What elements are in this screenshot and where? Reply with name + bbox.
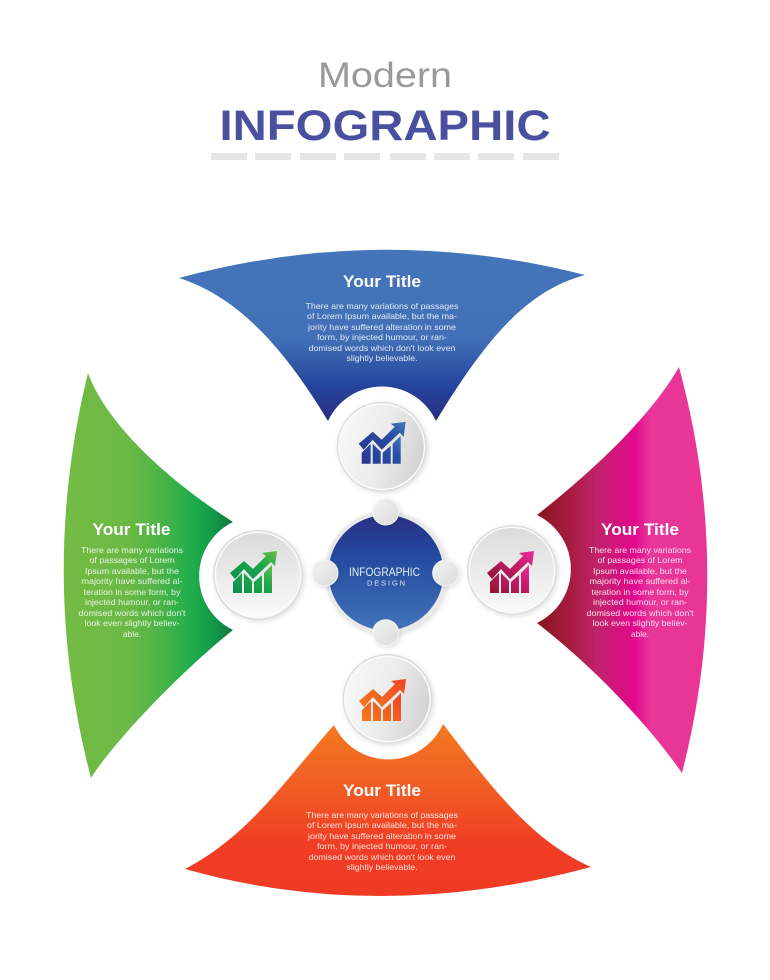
text block: blue panel body: slightly believable. — [346, 354, 418, 363]
text block: magenta panel body: domised words which don't — [586, 609, 694, 618]
text block: orange panel body: form, by injected humour, or ran- — [317, 842, 447, 851]
text block: magenta panel body: There are many variations — [589, 546, 691, 555]
text block: orange panel body: domised words which don't look even — [308, 853, 456, 862]
icon: green growth chart badge — [213, 530, 303, 620]
title: Modern Infographic — [211, 56, 559, 160]
dashed underline — [211, 153, 559, 160]
text block: magenta panel body: able. — [631, 630, 649, 639]
text: hub DESIGN: DESIGN — [367, 578, 405, 588]
text block: green panel body: injected humour, or ran- — [85, 598, 179, 607]
text block: magenta panel body: look even slightly believ- — [592, 619, 688, 628]
text block: green panel body: There are many variations — [81, 546, 183, 555]
text block: magenta panel body: majority have suffered al- — [590, 577, 691, 586]
text: hub INFOGRAPHIC: INFOGRAPHIC — [349, 565, 420, 579]
icon: blue growth chart badge — [337, 402, 427, 492]
center hub — [312, 499, 459, 646]
knobs on hub — [312, 499, 459, 646]
panel: bottom orange — [185, 724, 591, 896]
text block: green panel body: able. — [123, 630, 141, 639]
text block: blue panel body: jority have suffered alteration in some — [307, 323, 456, 332]
text block: magenta panel body: injected humour, or ran- — [593, 598, 687, 607]
panel: top blue — [179, 250, 585, 421]
text block: orange panel body — [306, 811, 458, 872]
text block: orange panel body: There are many variations of passages — [306, 811, 458, 820]
panel: left green — [64, 373, 233, 778]
text block: green panel body: Ipsum available, but the — [85, 567, 179, 576]
text block: blue panel body: There are many variations of passages — [306, 302, 458, 311]
text block: blue panel body: domised words which don't look even — [308, 344, 456, 353]
heading: green panel title: Your Title — [92, 521, 170, 539]
text block: magenta panel body: of passages of Lorem — [598, 556, 683, 565]
text block: green panel body — [78, 546, 186, 639]
panel: right magenta — [537, 367, 707, 773]
heading: blue panel title: Your Title — [343, 273, 421, 291]
icon: magenta growth chart badge — [467, 525, 557, 615]
text block: blue panel body: of Lorem Ipsum available, but the ma- — [307, 312, 457, 321]
text block: green panel body: of passages of Lorem — [90, 556, 175, 565]
text block: blue panel body: form, by injected humour, or ran- — [317, 333, 447, 342]
text block: green panel body: look even slightly believ- — [84, 619, 180, 628]
text block: magenta panel body — [586, 546, 694, 639]
text block: orange panel body: of Lorem Ipsum available, but the ma- — [307, 821, 457, 830]
text block: magenta panel body: Ipsum available, but the — [593, 567, 687, 576]
text block: green panel body: domised words which don't — [78, 609, 186, 618]
text block: orange panel body: slightly believable. — [346, 863, 418, 872]
heading: magenta panel title: Your Title — [601, 521, 679, 539]
text block: green panel body: teration in some form, by — [84, 588, 181, 597]
heading: orange panel title: Your Title — [343, 782, 421, 800]
heading: INFOGRAPHIC: INFOGRAPHIC — [220, 102, 550, 150]
text block: blue panel body — [306, 302, 458, 363]
text block: magenta panel body: teration in some form, by — [592, 588, 689, 597]
icon: orange growth chart badge — [342, 654, 432, 744]
heading: Modern: Modern — [318, 56, 452, 95]
text block: orange panel body: jority have suffered alteration in some — [307, 832, 456, 841]
text block: green panel body: majority have suffered al- — [82, 577, 183, 586]
